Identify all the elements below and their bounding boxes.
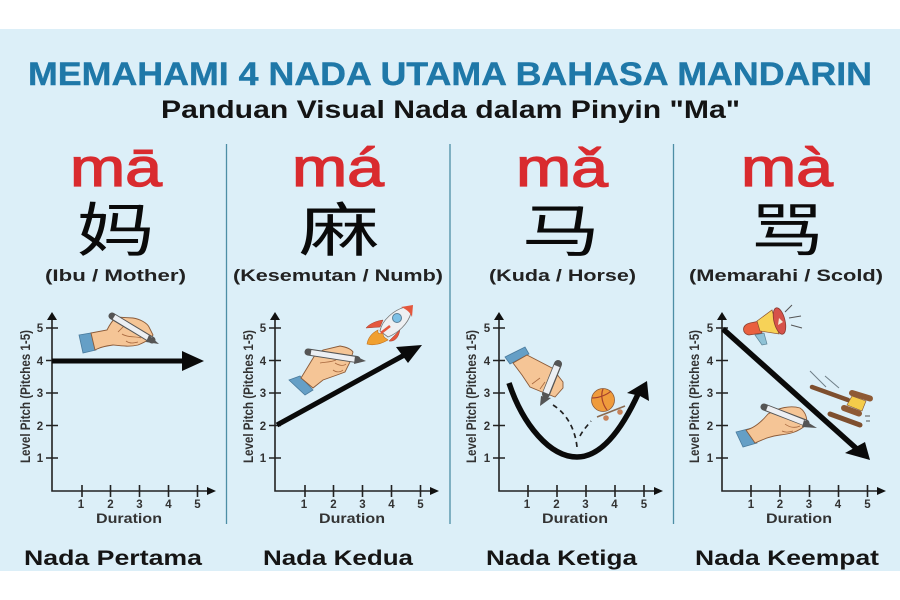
chart: dipping tone: 4 — [611, 499, 618, 511]
arrow: dipping pitch — [509, 381, 649, 457]
chart: level tone — [18, 312, 216, 526]
arrow: falling pitch — [723, 329, 870, 460]
character: numb: 麻 — [299, 184, 379, 268]
chart: rising tone: 2 — [260, 421, 266, 433]
character: mother: 妈 — [76, 183, 155, 268]
chart: falling tone: 4 — [707, 356, 714, 368]
chart: rising tone: Duration — [319, 511, 385, 526]
chart: level tone: 2 — [37, 421, 43, 433]
label: Nada Ketiga: Nada Ketiga — [486, 547, 637, 570]
chart: rising tone: 3 — [260, 388, 266, 400]
chart: rising tone: Level Pitch (Pitches 1-5) — [241, 330, 256, 463]
subtitle: Panduan Visual Nada dalam Pinyin "Ma" — [161, 96, 740, 124]
panel: first tone — [18, 138, 216, 570]
icon: hand with pen — [79, 316, 159, 353]
icon: hand with pen — [505, 347, 563, 406]
chart: rising tone: 1 — [301, 499, 308, 511]
chart: dipping tone — [464, 312, 663, 526]
chart: rising tone: 5 — [417, 499, 424, 511]
chart: level tone: 4 — [165, 499, 172, 511]
chart: level tone: 3 — [37, 388, 43, 400]
chart: falling tone: Duration — [766, 511, 832, 526]
chart: rising tone: 4 — [260, 356, 267, 368]
chart: dipping tone: 1 — [524, 499, 531, 511]
chart: falling tone: 1 — [748, 499, 755, 511]
chart: level tone: 1 — [78, 499, 85, 511]
meaning: numb: (Kesemutan / Numb) — [233, 266, 443, 285]
chart: dipping tone: Duration — [542, 511, 608, 526]
chart: dipping tone: Level Pitch (Pitches 1-5) — [464, 330, 479, 463]
chart: falling tone: 5 — [864, 499, 871, 511]
chart: level tone: 4 — [37, 356, 44, 368]
meaning: scold: (Memarahi / Scold) — [689, 266, 883, 285]
icon: megaphone — [744, 305, 802, 345]
chart: level tone: Duration — [96, 511, 162, 526]
chart: rising tone: 2 — [330, 499, 337, 511]
chart: falling tone: 5 — [707, 323, 714, 335]
label: Nada Keempat: Nada Keempat — [695, 547, 879, 570]
icon: gavel — [810, 371, 870, 425]
panel: fourth tone — [687, 138, 886, 570]
chart: dipping tone: 5 — [484, 323, 491, 335]
pinyin: ma third tone: mǎ — [516, 138, 609, 198]
chart: falling tone — [687, 305, 886, 526]
chart: falling tone: 4 — [835, 499, 842, 511]
arrow: level pitch — [52, 351, 204, 371]
chart: falling tone: 3 — [707, 388, 713, 400]
chart: dipping tone: 2 — [553, 499, 560, 511]
label: Nada Pertama: Nada Pertama — [24, 547, 202, 570]
chart: rising tone: 3 — [359, 499, 366, 511]
pinyin: ma first tone: mā — [70, 138, 163, 198]
label: Nada Kedua: Nada Kedua — [263, 547, 413, 570]
chart: rising tone: 1 — [260, 453, 267, 465]
chart: rising tone: 4 — [388, 499, 395, 511]
meaning: horse: (Kuda / Horse) — [489, 266, 636, 285]
meaning: mother: (Ibu / Mother) — [45, 266, 186, 285]
chart: rising tone — [241, 305, 439, 526]
pinyin: ma fourth tone: mà — [741, 138, 834, 198]
chart: falling tone: Level Pitch (Pitches 1-5) — [687, 330, 702, 463]
chart: level tone: 5 — [194, 499, 201, 511]
chart: level tone: 1 — [37, 453, 44, 465]
icon: ball on skateboard — [592, 388, 625, 421]
chart: dipping tone: 3 — [484, 388, 490, 400]
chart: dipping tone: 2 — [484, 421, 490, 433]
chart: dipping tone: 5 — [641, 499, 648, 511]
chart: falling tone: 1 — [707, 453, 714, 465]
character: horse: 马 — [522, 185, 600, 268]
chart: dipping tone: 1 — [484, 453, 491, 465]
chart: level tone: 3 — [136, 499, 143, 511]
character: scold: 骂 — [750, 185, 824, 268]
chart: level tone: 5 — [37, 323, 44, 335]
title: MEMAHAMI 4 NADA UTAMA BAHASA MANDARIN — [28, 56, 872, 92]
icon: hand with pen — [289, 346, 366, 395]
panel: third tone — [464, 138, 663, 570]
arrow: rising pitch — [277, 345, 422, 425]
chart: level tone: Level Pitch (Pitches 1-5) — [18, 330, 33, 463]
chart: falling tone: 2 — [707, 421, 713, 433]
chart: falling tone: 2 — [777, 499, 783, 511]
chart: level tone: 2 — [107, 499, 114, 511]
icon: rocket — [366, 305, 413, 345]
chart: falling tone: 3 — [806, 499, 812, 511]
icon: hand with pen — [736, 407, 817, 447]
chart: dipping tone: 3 — [582, 499, 589, 511]
chart: rising tone: 5 — [260, 323, 267, 335]
pinyin: ma second tone: má — [292, 138, 385, 198]
chart: dipping tone: 4 — [484, 356, 491, 368]
dashed bounce path — [553, 405, 591, 447]
panel: second tone — [233, 138, 443, 570]
